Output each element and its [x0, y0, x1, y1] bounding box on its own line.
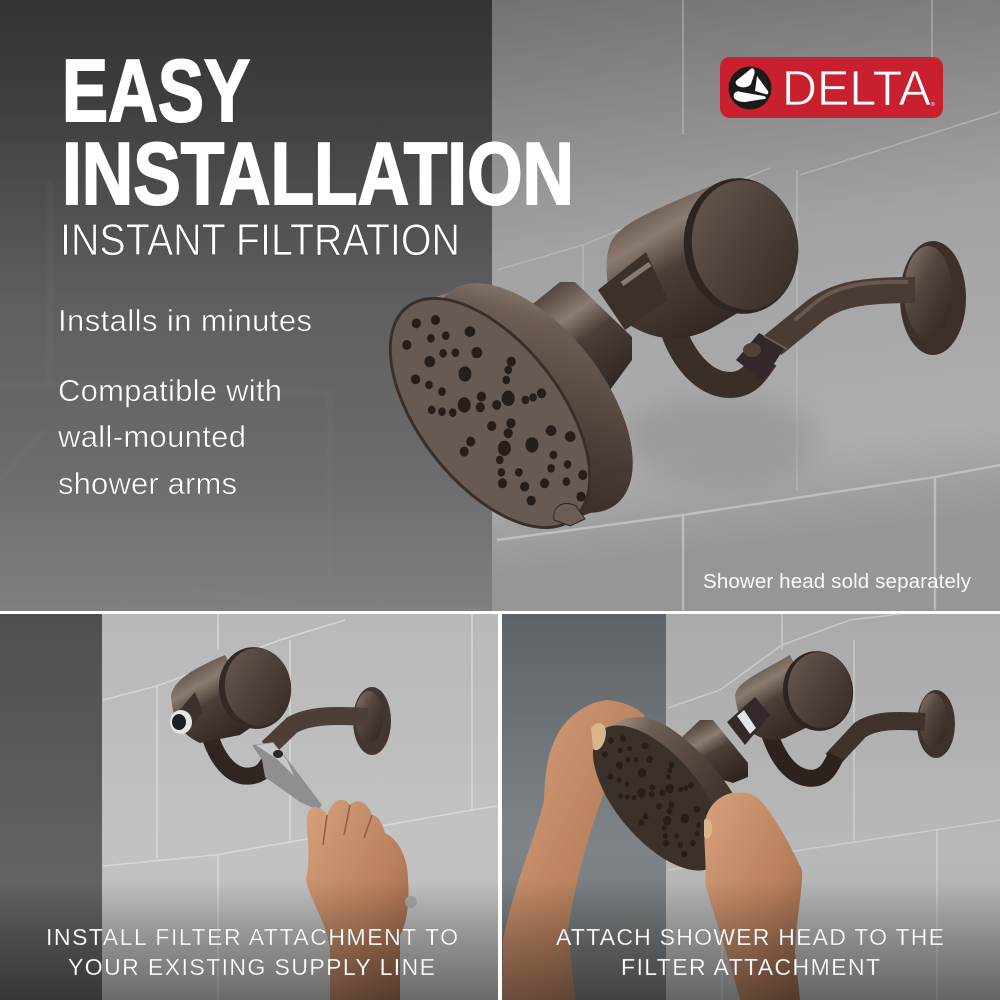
- shower head held: [569, 704, 748, 892]
- wrench end: [405, 896, 417, 908]
- feature text: installs in minutes: Installs in minutes: [58, 303, 312, 338]
- caption: step 1: YOUR EXISTING SUPPLY LINE: [68, 954, 435, 980]
- feature text: compatibility: shower arms: [58, 466, 237, 501]
- Delta logo: ®: [931, 101, 935, 108]
- caption: step 2: [556, 924, 944, 980]
- filter attachment: [727, 647, 858, 745]
- spray holes: [402, 315, 587, 506]
- shower arm: [207, 687, 391, 776]
- bottom fade: [502, 880, 1000, 1000]
- panel: main hero scene: [0, 0, 1000, 611]
- filter attachment: [170, 642, 296, 743]
- thumb: [591, 723, 606, 750]
- bottom fade: [0, 880, 498, 1000]
- subtitle: INSTANT FILTRATION: [60, 216, 460, 265]
- title: EASY: [62, 41, 250, 140]
- right arm and hand: [704, 793, 802, 1000]
- panel: step 2: [502, 614, 1000, 1000]
- caption: step 1: [46, 924, 458, 980]
- title: [62, 41, 574, 223]
- tile grout: [103, 614, 497, 1000]
- dark left column background: [0, 0, 492, 611]
- caption: step 1: INSTALL FILTER ATTACHMENT TO: [46, 924, 458, 950]
- left arm and hand: [502, 700, 645, 1000]
- Delta logo: [720, 57, 943, 118]
- shower arm: [770, 690, 955, 778]
- filter attachment: [598, 171, 807, 338]
- tile grout: [668, 614, 1000, 1000]
- panel: step 1: [0, 614, 498, 1000]
- feature text: compatibility: wall-mounted: [57, 419, 246, 454]
- shower arm and flange: [668, 241, 966, 385]
- title: INSTALLATION: [62, 124, 574, 223]
- spray holes: [602, 735, 720, 857]
- feature text: compatibility: [57, 373, 282, 501]
- caption: step 2: FILTER ATTACHMENT: [621, 954, 880, 980]
- hand: [306, 800, 409, 1000]
- wrench: [252, 742, 322, 810]
- wall tile grout: [497, 0, 1000, 610]
- mode toggle: [554, 504, 585, 526]
- shower head: [350, 249, 671, 564]
- disclaimer note: Shower head sold separately: [703, 570, 972, 593]
- feature text: compatibility: Compatible with: [58, 373, 282, 408]
- Delta logo: DELTA: [782, 62, 931, 116]
- caption: step 2: ATTACH SHOWER HEAD TO THE: [556, 924, 944, 950]
- wall shadow: [620, 395, 820, 485]
